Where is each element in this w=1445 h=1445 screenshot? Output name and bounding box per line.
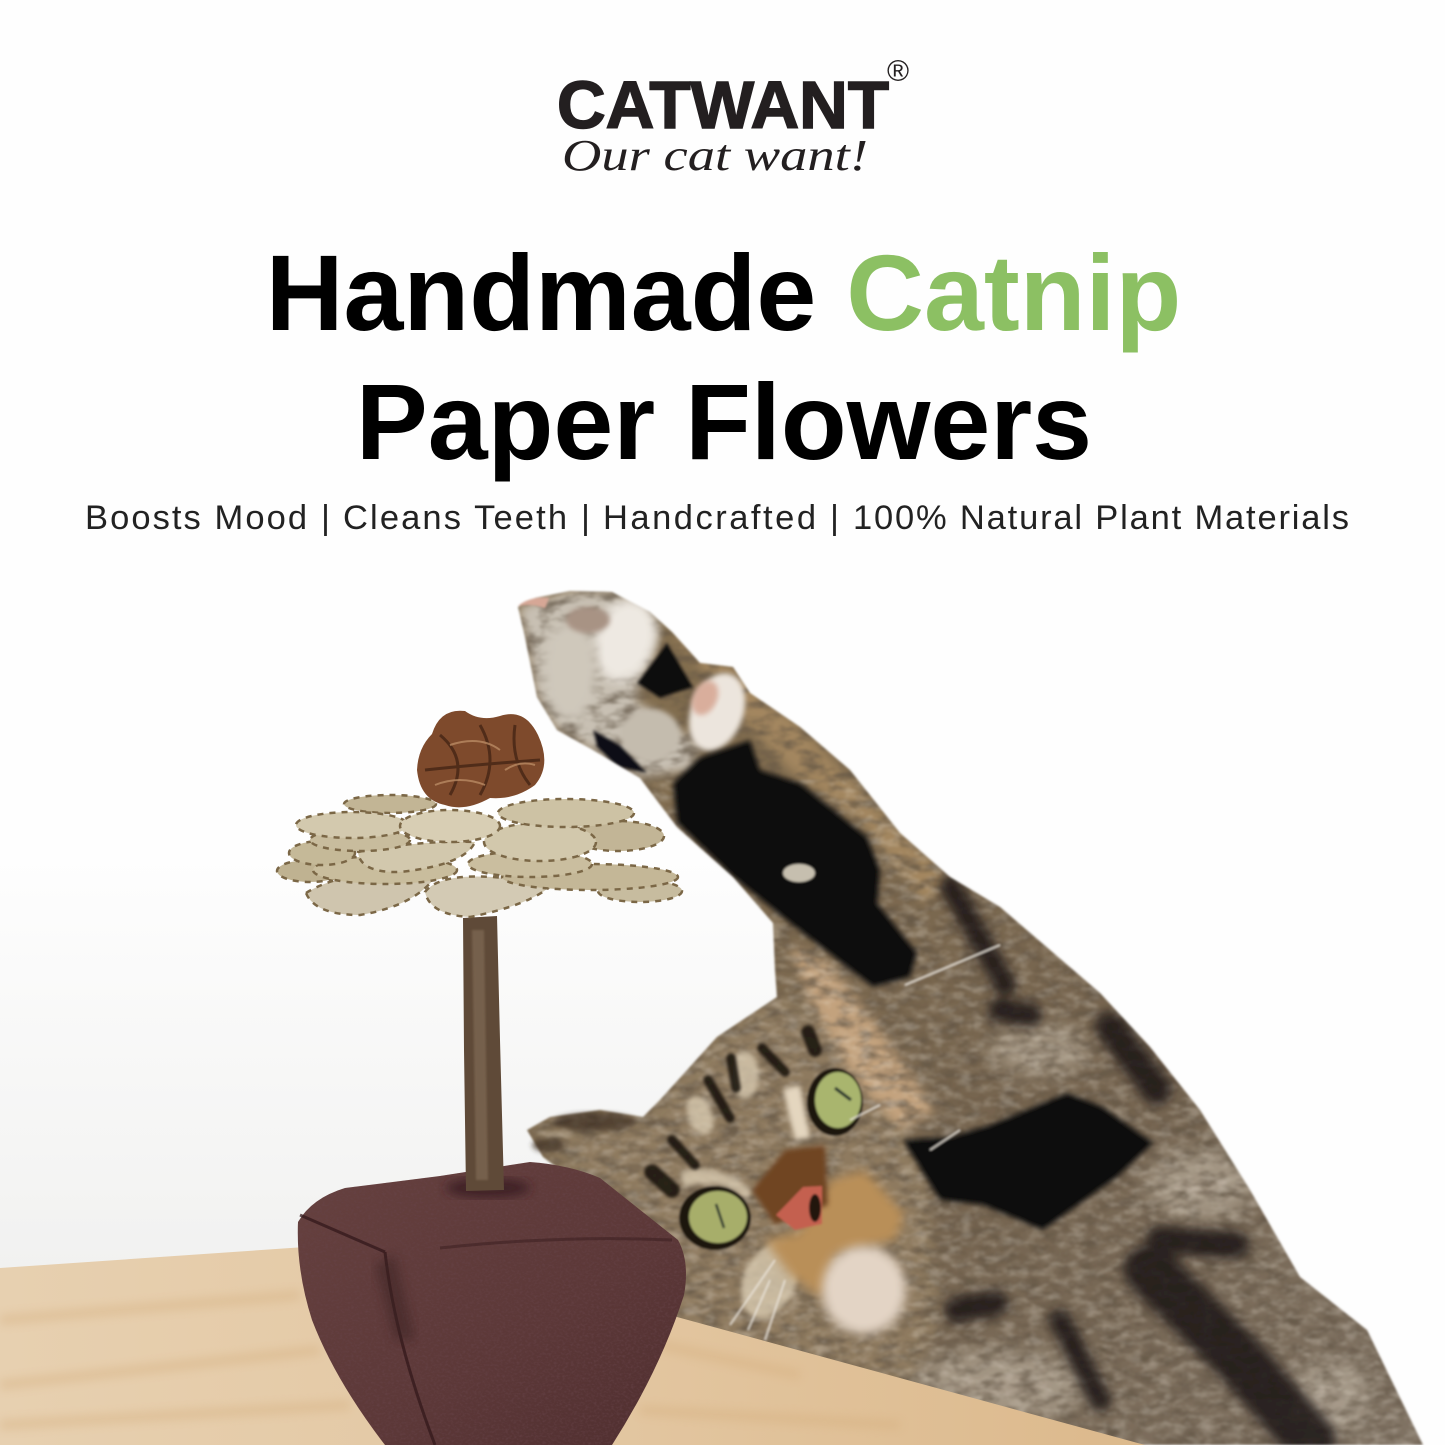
upper black toe patch (637, 643, 693, 698)
cushion weave (290, 1160, 690, 1445)
bud creases (425, 725, 540, 795)
cushion seam shadow (375, 1255, 415, 1340)
nose (776, 1186, 822, 1230)
whiskers (730, 945, 1000, 1340)
flower petals (277, 795, 682, 917)
subtitle benefits line: 100% Natural Plant Materials (853, 499, 1349, 537)
ear markings (532, 1113, 637, 1152)
registered mark: ® (887, 55, 909, 88)
cat eye lower (679, 1186, 751, 1250)
chin white (822, 1246, 906, 1334)
table wood grain (0, 1295, 900, 1425)
stem highlight (472, 930, 488, 1180)
dried flower bud (417, 711, 544, 807)
subtitle benefits line (85, 499, 1349, 537)
paw toe (685, 670, 749, 758)
subtitle benefits line: | (830, 499, 839, 537)
bud highlights (435, 741, 535, 785)
paw grey white fur (518, 591, 700, 778)
dark fur texture (500, 580, 1445, 1445)
body dark bands (950, 885, 1310, 1440)
title line 2: Paper Flowers (356, 362, 1092, 482)
arm tan top fur (672, 632, 950, 905)
paw fur middle (620, 709, 680, 761)
white spot on arm (783, 864, 815, 882)
paw white toe fur (590, 595, 664, 686)
subtitle benefits line: Handcrafted (603, 499, 816, 537)
stem (463, 916, 504, 1191)
cat head base (527, 997, 940, 1400)
subtitle benefits line: | (321, 499, 330, 537)
muzzle tan (765, 1170, 905, 1300)
cat body and arm silhouette (518, 591, 1423, 1445)
paw lower fur (542, 620, 598, 720)
light fur texture (500, 780, 1445, 1445)
nose bridge (752, 1145, 828, 1225)
logo tagline: Our cat want! (562, 131, 868, 180)
forehead marking (783, 1085, 810, 1140)
wall shading (0, 850, 800, 1270)
lower black paw patch (593, 730, 647, 773)
head cream patches (680, 1051, 810, 1327)
shoulder pale tan band (790, 945, 935, 1130)
product: catnip paper flower toy (277, 711, 690, 1445)
cat photo (500, 580, 1445, 1445)
head stripes (652, 1032, 815, 1190)
subtitle benefits line: Cleans Teeth (343, 499, 567, 537)
toy base cushion (298, 1162, 686, 1445)
subtitle benefits line: | (581, 499, 590, 537)
paw pad pink (566, 607, 610, 633)
cushion seams (300, 1215, 672, 1445)
brand logo (557, 55, 909, 180)
black shoulder patch (903, 1093, 1153, 1230)
title line 1: Handmade Catnip (266, 233, 1181, 353)
cat eye upper (807, 1068, 863, 1136)
claw (518, 598, 549, 608)
logo wordmark: CATWANT (557, 68, 889, 143)
toe pad pink (688, 678, 721, 718)
nostril (809, 1194, 821, 1222)
title (266, 233, 1181, 482)
black forearm patch (673, 740, 917, 987)
cushion hollow (446, 1178, 530, 1198)
body pale fur patches (910, 1025, 1370, 1440)
table top (0, 1246, 1145, 1445)
subtitle benefits line: Boosts Mood (85, 499, 307, 537)
